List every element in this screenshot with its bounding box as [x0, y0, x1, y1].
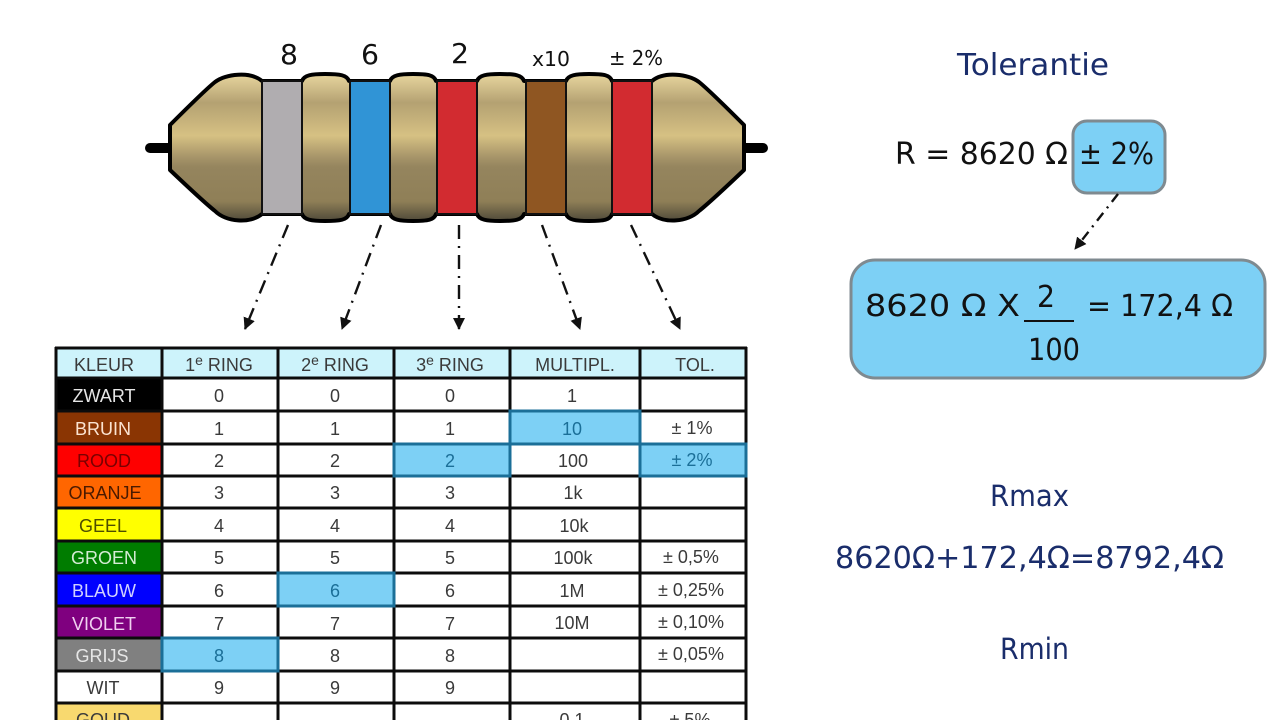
arrows from bands to table — [245, 225, 680, 329]
header labels: e — [426, 352, 434, 368]
colour names: BLAUW — [72, 581, 136, 601]
colour names: VIOLET — [72, 614, 136, 634]
tolerance column — [658, 418, 724, 720]
ring 1 column: 5 — [214, 548, 224, 568]
resistor — [150, 74, 763, 221]
header labels: 3 — [416, 355, 426, 375]
band value labels: ± 2% — [609, 46, 663, 70]
ring 2 column — [330, 386, 340, 698]
calculation box: 8620 Ω X — [865, 289, 1020, 324]
tolerance column: ± 0,05% — [658, 644, 724, 664]
header labels: 1 — [185, 355, 195, 375]
header labels — [74, 352, 715, 375]
colour names: ORANJE — [68, 483, 142, 503]
ring 3 column: 8 — [445, 646, 455, 666]
multiplier column: 10 — [562, 419, 582, 439]
ring 1 column: 8 — [214, 646, 224, 666]
colour names: GEEL — [79, 516, 127, 536]
ring 1 column: 7 — [214, 614, 224, 634]
multiplier column: 10M — [554, 613, 590, 633]
colour names: GRIJS — [75, 646, 129, 666]
ring 2 column: 1 — [330, 419, 340, 439]
header labels: KLEUR — [74, 355, 134, 375]
colour code table — [55, 347, 747, 720]
ring 2 column: 5 — [330, 548, 340, 568]
ring 1 column: 9 — [214, 678, 224, 698]
band value labels — [280, 37, 663, 71]
band value labels: x10 — [532, 47, 570, 71]
ring 3 column: 3 — [445, 483, 455, 503]
multiplier column: 1k — [563, 483, 584, 503]
ring 1 column: 3 — [214, 483, 224, 503]
tolerance column: ± 2% — [672, 450, 712, 470]
tolerance column: ± 1% — [672, 418, 712, 438]
ring 3 column: 6 — [445, 581, 455, 601]
multiplier column: 1M — [559, 581, 585, 601]
ring 2 column: 2 — [330, 451, 340, 471]
ring 3 column: 9 — [445, 678, 455, 698]
header labels: RING — [319, 355, 369, 375]
multiplier column — [553, 386, 594, 720]
header labels: e — [195, 352, 203, 368]
header labels: RING — [434, 355, 484, 375]
colour names — [68, 386, 142, 720]
ring 2 column: 6 — [330, 581, 340, 601]
ring 1 column: 0 — [214, 386, 224, 406]
multiplier column: 1 — [567, 386, 577, 406]
multiplier column: 100 — [558, 451, 588, 471]
header labels: MULTIPL. — [535, 355, 615, 375]
highlighted cell borders — [162, 411, 746, 671]
Rmax calculation: 8620Ω+172,4Ω=8792,4Ω — [835, 541, 1224, 576]
highlighted cells — [162, 411, 746, 671]
left lead — [150, 143, 172, 153]
header row fill — [56, 348, 746, 378]
tolerance callout box — [1073, 121, 1165, 193]
ring 3 column: 0 — [445, 386, 455, 406]
ring 3 column — [445, 386, 455, 698]
arrow: tolerance to calculation — [1075, 194, 1118, 249]
header labels: 2 — [301, 355, 311, 375]
ring 2 column: 4 — [330, 516, 340, 536]
calculation box: = 172,4 Ω — [1087, 289, 1233, 324]
band value labels: 8 — [280, 38, 298, 71]
tolerance column: ± 0,5% — [663, 547, 719, 567]
band: brown — [526, 81, 566, 214]
band: blue — [350, 81, 390, 214]
heading: Rmax: Rmax — [990, 479, 1069, 513]
multiplier column: 10k — [559, 516, 590, 536]
multiplier column: 100k — [553, 548, 594, 568]
colour names: GROEN — [71, 548, 137, 568]
ring 2 column: 3 — [330, 483, 340, 503]
heading: Tolerantie: Tolerantie — [956, 48, 1109, 83]
right lead — [742, 143, 763, 153]
ring 2 column: 0 — [330, 386, 340, 406]
header labels: TOL. — [675, 355, 715, 375]
ring 3 column: 2 — [445, 451, 455, 471]
band value labels: 2 — [451, 37, 469, 70]
ring 3 column: 5 — [445, 548, 455, 568]
ring 1 column: 4 — [214, 516, 224, 536]
table background — [56, 348, 746, 720]
ring 1 column: 6 — [214, 581, 224, 601]
band: red tolerance — [612, 81, 652, 214]
ring 3 column: 7 — [445, 614, 455, 634]
band value labels: 6 — [361, 38, 379, 71]
ring 2 column: 8 — [330, 646, 340, 666]
ring 2 column: 7 — [330, 614, 340, 634]
tolerance column: ± 0,10% — [658, 612, 724, 632]
colour names: WIT — [86, 678, 120, 698]
calculation box — [851, 260, 1265, 378]
band: grey — [262, 81, 302, 214]
header labels: RING — [203, 355, 253, 375]
ring 1 column: 1 — [214, 419, 224, 439]
header labels: e — [311, 352, 319, 368]
tolerance callout box: ± 2% — [1079, 137, 1154, 172]
ring 1 column: 2 — [214, 451, 224, 471]
colour names: ZWART — [72, 386, 136, 406]
resistance value: R = 8620 Ω — [895, 137, 1068, 172]
calculation box: 100 — [1028, 333, 1080, 368]
tolerance column: ± 0,25% — [658, 580, 724, 600]
heading: Rmin: Rmin — [1000, 632, 1069, 666]
colour names: ROOD — [77, 451, 131, 471]
ring 2 column: 9 — [330, 678, 340, 698]
resistor body — [170, 74, 744, 221]
grid lines — [55, 347, 747, 720]
ring 3 column: 1 — [445, 419, 455, 439]
calculation box: 2 — [1037, 280, 1055, 315]
band: red — [437, 81, 477, 214]
ring 1 column — [214, 386, 224, 698]
colour names: BRUIN — [75, 419, 131, 439]
colour swatches — [56, 378, 162, 720]
ring 3 column: 4 — [445, 516, 455, 536]
